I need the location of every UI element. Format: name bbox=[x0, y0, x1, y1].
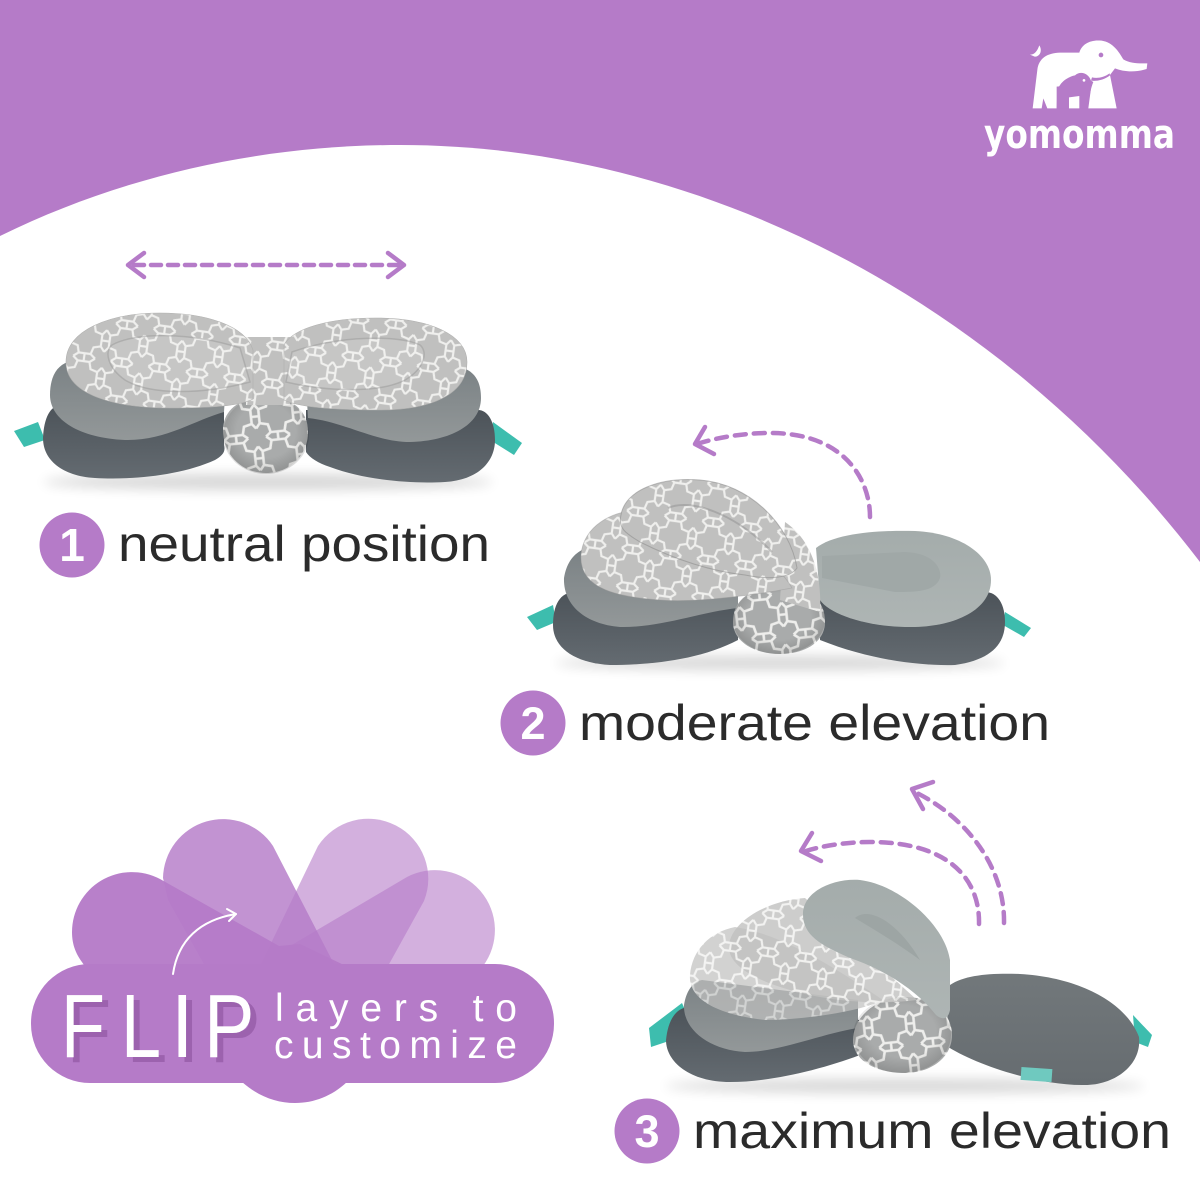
text: maximum elevation: maximum elevation bbox=[693, 1103, 1171, 1159]
heading: FLIP: F bbox=[67, 981, 111, 1082]
product: pillow moderate elevation bbox=[527, 480, 1031, 670]
heading: FLIP: L bbox=[127, 981, 167, 1082]
ball centre bbox=[733, 587, 825, 654]
bottom bulge bbox=[242, 1082, 347, 1103]
heading: FLIP: L bbox=[121, 976, 161, 1077]
label: step 2 bbox=[500, 690, 1050, 756]
label: step 3 bbox=[614, 1098, 1171, 1164]
number badge 1: 1 bbox=[59, 519, 85, 571]
icon: teal tabs bbox=[649, 1003, 1152, 1047]
middle grey layer bbox=[50, 362, 481, 442]
petals bbox=[72, 819, 495, 966]
heading: FLIP: P bbox=[210, 981, 260, 1081]
number badge 3: 3 bbox=[634, 1106, 660, 1157]
number badge 2 bbox=[500, 690, 566, 756]
graphic: flip layers callout bbox=[31, 819, 554, 1103]
number badge 2: 2 bbox=[520, 698, 546, 749]
middle grey layer bbox=[564, 550, 738, 627]
text: layers to customize bbox=[274, 987, 517, 1067]
middle grey layer bbox=[684, 980, 858, 1052]
icon: teal tabs bbox=[527, 605, 1031, 637]
text: layers to customize: layers to bbox=[275, 987, 517, 1030]
number badge 3 bbox=[614, 1098, 680, 1164]
top layer indent bbox=[855, 914, 920, 960]
bottom dark layer bbox=[666, 1007, 860, 1082]
upper printed loop bbox=[620, 480, 797, 578]
centre strip bbox=[246, 337, 290, 405]
top printed layer bbox=[66, 313, 467, 410]
bottom dark layer bbox=[43, 405, 495, 482]
arrow: moderate elevation curve bbox=[695, 427, 870, 517]
text: layers to customize: customize bbox=[274, 1024, 517, 1067]
right inner ring bbox=[822, 552, 940, 592]
product: pillow neutral position bbox=[14, 313, 522, 490]
logo: yomomma bbox=[984, 40, 1175, 158]
upper printed loop bbox=[729, 898, 917, 1002]
text: neutral position: neutral position bbox=[118, 516, 490, 572]
right flat dark layer bbox=[945, 974, 1139, 1085]
arrow: curved white arrow bbox=[173, 909, 236, 974]
label tag bbox=[1021, 1067, 1052, 1082]
heading: FLIP: I bbox=[177, 981, 200, 1082]
icon: elephant with calf bbox=[1030, 40, 1147, 108]
heading: FLIP bbox=[61, 976, 260, 1082]
arrow: maximum elevation upper curve bbox=[912, 782, 1004, 923]
product: pillow maximum elevation bbox=[649, 880, 1152, 1093]
connector strip bbox=[780, 522, 820, 612]
upper loop indent bbox=[668, 505, 772, 552]
label: step 1 bbox=[40, 512, 490, 578]
bottom dark layer bbox=[553, 592, 1005, 665]
right flipped light layer bbox=[816, 531, 991, 627]
inner rings bbox=[108, 336, 424, 392]
pill banner bbox=[31, 964, 554, 1083]
number badge 1 bbox=[40, 512, 104, 578]
text: moderate elevation: moderate elevation bbox=[579, 695, 1050, 751]
arrow: horizontal dashed double arrow bbox=[128, 253, 404, 277]
heading: FLIP: I bbox=[171, 976, 194, 1077]
lower printed loop bbox=[581, 510, 792, 601]
top flipped light layer bbox=[803, 880, 950, 1018]
arrow: maximum elevation lower curve bbox=[801, 833, 979, 924]
heading: FLIP: F bbox=[61, 976, 105, 1077]
icon: teal tabs bbox=[14, 422, 522, 455]
ball centre bbox=[223, 397, 308, 473]
lower printed loop bbox=[690, 927, 883, 1020]
ball centre bbox=[853, 997, 952, 1073]
heading: FLIP: P bbox=[204, 976, 254, 1076]
